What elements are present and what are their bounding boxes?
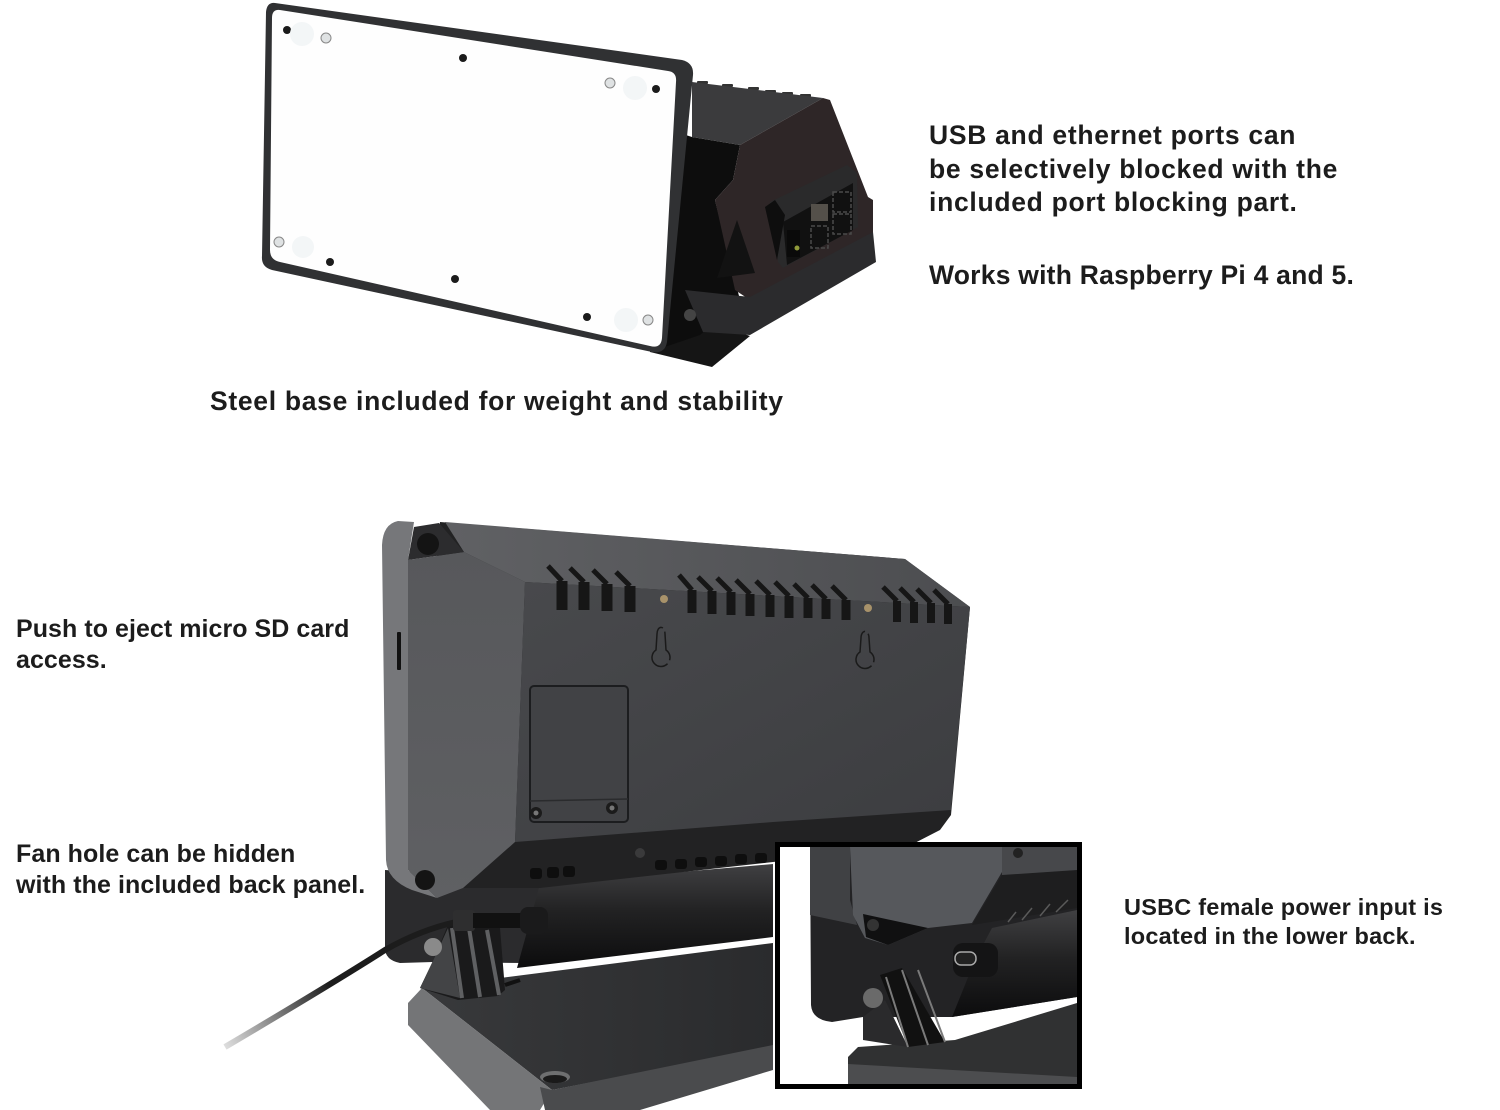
vent bumps [697,81,811,97]
bottom device: lower rear plane and frame [385,864,773,968]
caption: fan hole: Fan hole can be hidden [16,840,295,868]
inset: body [810,847,1077,1022]
inset: base plate [848,1003,1077,1084]
caption: USB-C power input: USBC female power input is [1124,894,1443,920]
caption: steel base: Steel base included for weight and stability [210,386,784,416]
lower vents [530,853,767,879]
top device: white back panel with frame [262,3,693,352]
inset photo: USB-C port close-up [775,842,1082,1089]
caption: fan hole: with the included back panel. [16,871,365,899]
caption: Raspberry Pi compatibility: Works with Raspberry Pi 4 and 5. [929,260,1354,290]
inset: vent marks [1008,900,1068,922]
keyhole mounts [652,627,874,668]
top-left screw recess [408,523,464,560]
bottom device: vented back housing [382,521,970,898]
caption: micro SD card: Push to eject micro SD card [16,615,349,643]
caption: USB and ethernet ports [929,120,1338,217]
mounting holes [660,595,872,612]
bottom device: steel base [408,943,773,1110]
caption: USB and ethernet ports: included port blocking part. [929,187,1298,217]
caption: USB-C power input [1124,894,1443,949]
vent slots [548,566,948,624]
inset: USB-C socket [953,943,998,977]
port cluster [765,165,858,268]
caption: micro SD card [16,615,349,674]
bottom device: power cable and connector [225,907,548,1047]
caption: fan hole [16,840,365,899]
corner screws [415,533,439,890]
top device: steel base and back body [650,81,876,367]
back panel with screws [530,686,628,822]
side micro SD button [397,632,401,670]
caption: USB and ethernet ports: USB and ethernet ports can [929,120,1296,150]
caption: USB-C power input: located in the lower back. [1124,923,1416,949]
inset: mount [863,968,945,1047]
caption: USB and ethernet ports: be selectively blocked with the [929,154,1338,184]
caption: micro SD card: access. [16,646,107,674]
bottom device: mount [420,925,520,1000]
